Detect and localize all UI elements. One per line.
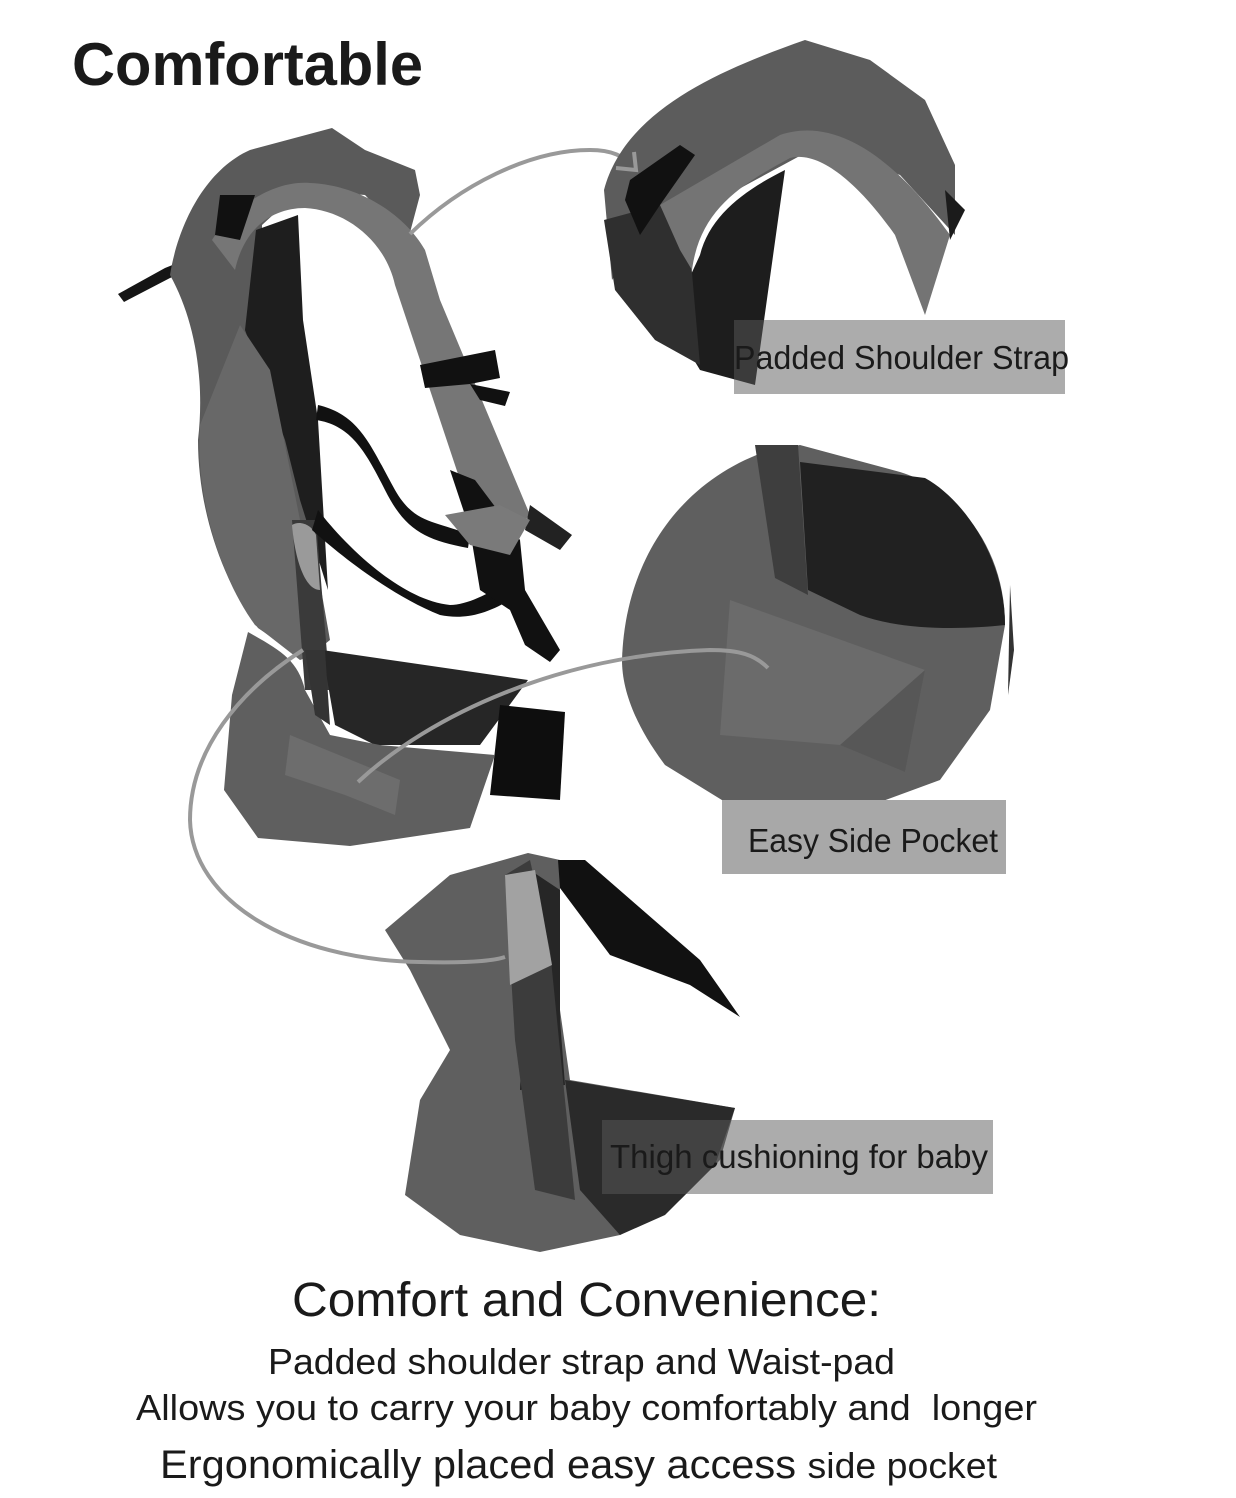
- webbing straps: [316, 405, 470, 548]
- inner dark lining: [245, 215, 328, 590]
- arrow: main strap to shoulder detail: [410, 150, 636, 234]
- title: Comfortable: [72, 31, 423, 98]
- detail circle: easy side pocket: [622, 445, 1014, 805]
- text: padded shoulder strap and waist-pad: Padded shoulder strap and Waist-pad: [268, 1341, 895, 1382]
- body panel: [199, 325, 326, 660]
- text: carry comfortably: Allows you to carry your baby comfortably and longer: [136, 1387, 1037, 1428]
- label: easy side pocket: [722, 800, 1006, 874]
- hood: [604, 40, 955, 280]
- label: thigh cushioning: Thigh cushioning for baby: [610, 1138, 988, 1175]
- detail circle: thigh cushioning: [385, 853, 740, 1252]
- heading: comfort and convenience: Comfort and Convenience:: [292, 1274, 881, 1327]
- text: side pocket: Ergonomically placed easy access side pocket: [160, 1443, 997, 1487]
- padded strap: [212, 183, 530, 545]
- label: padded shoulder strap: Padded Shoulder Strap: [734, 339, 1069, 376]
- arrow: waist to thigh detail: [190, 650, 505, 962]
- cord: [118, 248, 222, 302]
- label: easy side pocket: Easy Side Pocket: [748, 822, 998, 859]
- arrow: pocket to side pocket detail: [358, 650, 768, 782]
- inner lining: [670, 170, 785, 385]
- seat and waist band: [322, 650, 528, 745]
- hood and body: [170, 128, 420, 660]
- label: thigh cushioning: [602, 1120, 993, 1194]
- arrowhead: shoulder detail: [616, 152, 636, 170]
- label: padded shoulder strap: [734, 320, 1069, 394]
- pad: [660, 131, 950, 315]
- strap buckle: [420, 350, 510, 406]
- detail circle: padded shoulder strap: [604, 40, 965, 385]
- main product: baby carrier: [118, 128, 572, 846]
